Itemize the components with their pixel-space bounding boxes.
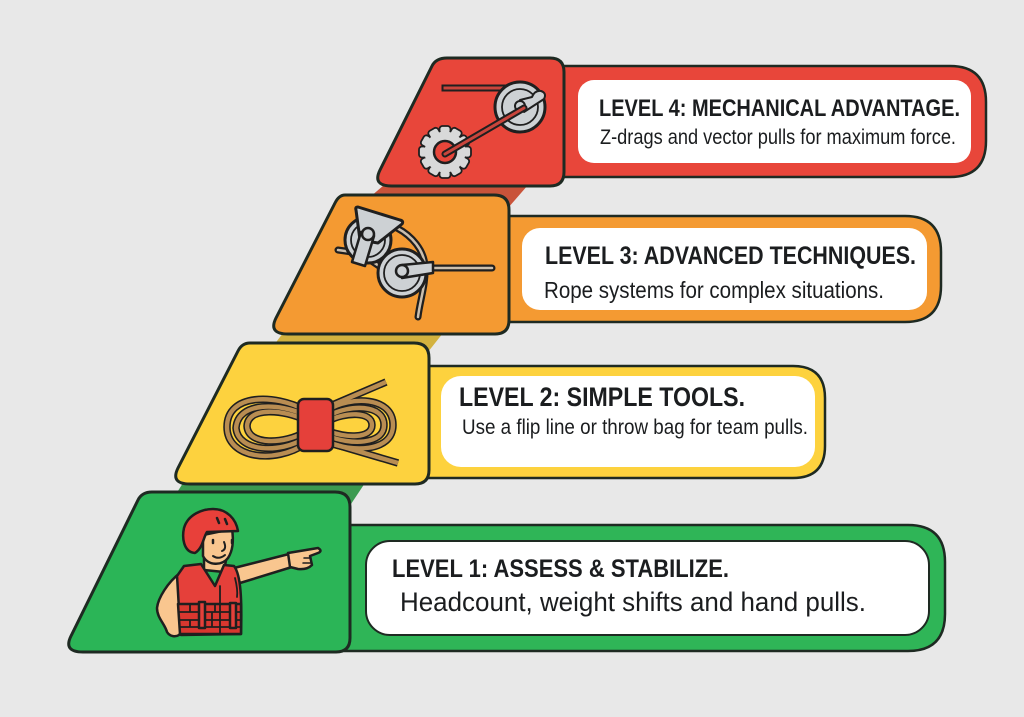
level 3 description: Rope systems for complex situations.: [544, 277, 884, 303]
level 1 bar: [345, 525, 945, 651]
level 1 panel: [69, 492, 350, 652]
level 1 description: Headcount, weight shifts and hand pulls.: [400, 587, 866, 617]
level 2 text box: [441, 376, 815, 467]
level 3 bar: [505, 216, 941, 322]
level 3 panel: [274, 195, 509, 334]
level 2 bar: [425, 366, 825, 478]
level 4 text box: [578, 80, 971, 163]
connector: level 3 to level 2: [274, 333, 443, 352]
level 4 bar: [560, 66, 986, 177]
level 2 description: Use a flip line or throw bag for team pulls.: [462, 415, 808, 439]
connector: level 4 to level 3: [370, 185, 528, 208]
icon: coiled rope with red strap: [227, 382, 398, 463]
icon: pulleys and rope system: [338, 207, 492, 317]
level 2 heading: LEVEL 2: SIMPLE TOOLS.: [459, 382, 745, 412]
level 4 step: [378, 58, 986, 186]
level 2 step: [176, 343, 825, 484]
level 3 step: [274, 195, 941, 334]
level 4 panel: [378, 58, 564, 186]
level 4 description: Z-drags and vector pulls for maximum force.: [600, 126, 956, 149]
level 2 panel: [176, 343, 429, 484]
level 3 text box: [522, 228, 927, 310]
connector: level 2 to level 1: [176, 483, 365, 507]
level 1 step: [69, 492, 945, 652]
icon: gear, rod and pulley: [419, 82, 545, 178]
level 3 heading: LEVEL 3: ADVANCED TECHNIQUES.: [545, 242, 916, 270]
level 1 heading: LEVEL 1: ASSESS & STABILIZE.: [392, 555, 729, 583]
icon: rescuer pointing in helmet and life vest: [157, 509, 320, 636]
level 1 text box: [366, 541, 929, 635]
